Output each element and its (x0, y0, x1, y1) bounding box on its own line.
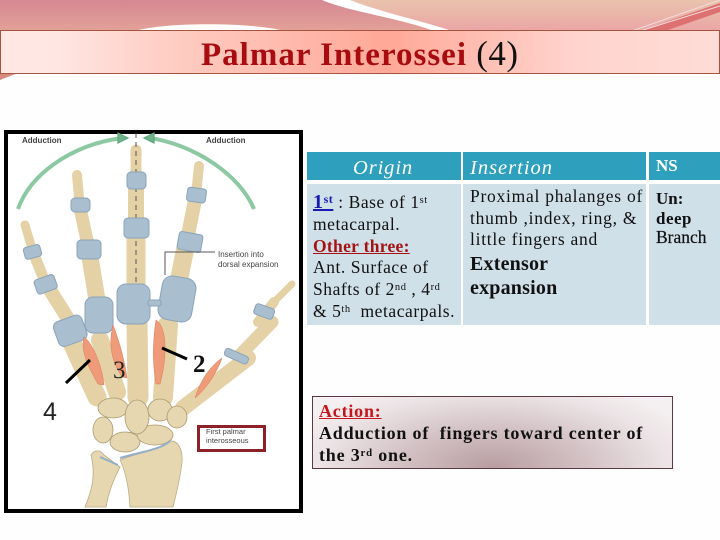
origin text: & 5th metacarpals. (313, 301, 455, 321)
finger and metacarpal bones (25, 150, 292, 408)
carpal bones (93, 398, 187, 452)
adduction arrows (18, 133, 254, 209)
origin text: Ant. Surface of (313, 257, 429, 277)
first palmar interosseous label: First palmar (206, 427, 246, 436)
adduction labels (22, 136, 246, 145)
NS cell (649, 184, 720, 325)
header text: insertion: Insertion (470, 157, 553, 179)
pointer line to muscle 4 (66, 360, 90, 383)
title banner (0, 30, 720, 74)
NS text: Branch (656, 227, 707, 247)
radius and ulna (85, 441, 182, 507)
palmar interossei muscles (83, 320, 222, 398)
header: NS (649, 152, 720, 180)
header: origin (307, 152, 461, 180)
number 4: 4 (43, 398, 57, 426)
origin text: 1st : Base of 1st (313, 191, 428, 213)
insertion text (470, 186, 643, 298)
first palmar interosseous label: interosseous (206, 436, 249, 445)
origin text: Other three: (313, 236, 410, 256)
insertion text: Extensor (470, 252, 548, 274)
action text (319, 401, 643, 465)
insertion leader line and label: dorsal expansion (218, 260, 278, 269)
anatomical hand illustration (4, 130, 303, 513)
origin text: Shafts of 2nd , 4rd (313, 279, 440, 299)
NS text: deep (656, 208, 692, 228)
number 3: 3 (113, 357, 126, 384)
table: origin, insertion, nerve supply (307, 152, 720, 326)
decorative header background (0, 0, 720, 80)
header: insertion (463, 152, 646, 180)
pointer line to muscle 2 (162, 348, 187, 359)
origin text (313, 191, 455, 321)
insertion leader line and label (165, 250, 278, 275)
insertion text: little fingers and (470, 229, 598, 249)
joint capsules (23, 172, 275, 365)
insertion cell (463, 184, 646, 325)
insertion text: Proximal phalanges of (470, 186, 643, 206)
insertion text: expansion (470, 276, 557, 298)
insertion text: thumb ,index, ring, & (470, 208, 637, 228)
title text: Palmar Interossei (4) (201, 34, 519, 73)
header text: NS: NS (656, 156, 678, 175)
adduction labels: Adduction (206, 136, 246, 145)
origin cell (307, 184, 461, 325)
action text: Action: (319, 401, 382, 421)
centre line of the hand (135, 133, 137, 285)
action text: Adduction of fingers toward center of (319, 423, 643, 443)
first palmar interosseous label (198, 426, 264, 450)
header text: origin: Origin (353, 157, 413, 179)
insertion leader line and label: Insertion into (218, 250, 264, 259)
NS text: Un: (656, 189, 683, 208)
NS text (656, 189, 707, 247)
adduction labels: Adduction (22, 136, 62, 145)
action text: the 3rd one. (319, 445, 413, 465)
number 2: 2 (193, 351, 206, 378)
origin text: metacarpal. (313, 214, 400, 234)
action callout box (312, 396, 673, 469)
